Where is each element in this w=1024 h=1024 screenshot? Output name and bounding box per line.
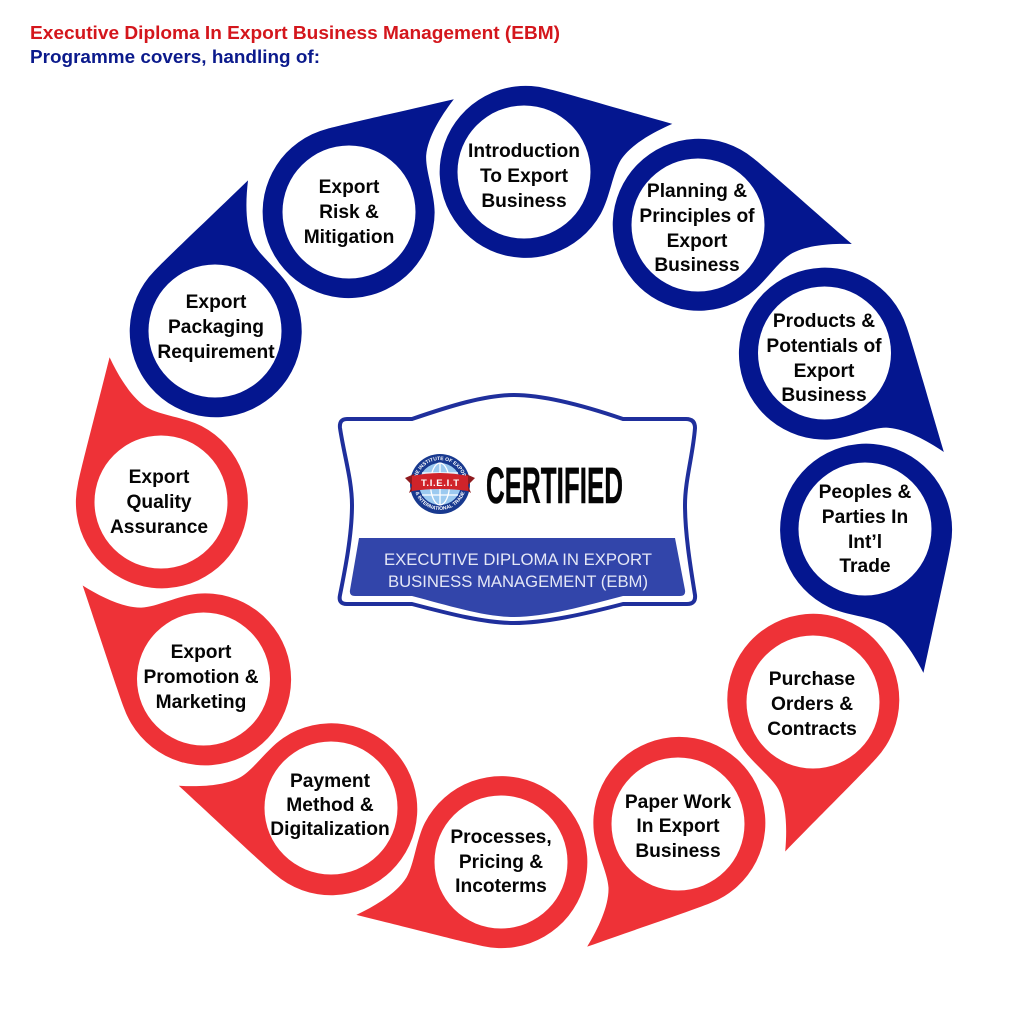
logo: T.I.E.I.T seal bbox=[405, 454, 475, 514]
step: Peoples & Parties In Int'l Trade: Parties In bbox=[822, 507, 908, 528]
step: Processes, Pricing & Incoterms bbox=[327, 752, 612, 996]
title: Executive Diploma In Export Business Management (EBM) bbox=[30, 22, 560, 43]
step: Export Risk & Mitigation: Mitigation bbox=[304, 227, 394, 248]
step: Export Promotion & Marketing: Export bbox=[171, 642, 232, 663]
step: Payment Method & Digitalization: Payment bbox=[290, 771, 371, 792]
step: Purchase Orders & Contracts bbox=[701, 600, 913, 867]
step: Processes, Pricing & Incoterms: Processes, bbox=[450, 827, 552, 848]
step: Products & Potentials of Export Business: Products & bbox=[773, 311, 875, 332]
step: Export Quality Assurance: Export bbox=[129, 467, 190, 488]
step: Planning & Principles of Export Business: Export bbox=[667, 231, 728, 252]
step: Export Risk & Mitigation bbox=[227, 40, 517, 334]
step: Peoples & Parties In Int'l Trade: Trade bbox=[839, 556, 891, 577]
logo: T.I.E.I.T seal: & INTERNATIONAL TRADE bbox=[416, 491, 465, 510]
step: Products & Potentials of Export Business bbox=[704, 233, 999, 518]
step: Peoples & Parties In Int'l Trade: Peoples & bbox=[819, 482, 912, 503]
step: Export Packaging Requirement bbox=[114, 162, 332, 433]
step: Planning & Principles of Export Business bbox=[603, 129, 862, 329]
center badge: certified bbox=[338, 393, 698, 625]
step: Paper Work In Export Business bbox=[518, 703, 800, 998]
step: Export Quality Assurance bbox=[29, 328, 272, 612]
logo: T.I.E.I.T seal: T.I.E.I.T bbox=[421, 478, 459, 489]
step: Purchase Orders & Contracts: Orders & bbox=[771, 694, 853, 715]
subtitle: Programme covers, handling of: bbox=[30, 46, 320, 67]
step: Peoples & Parties In Int'l Trade bbox=[754, 418, 1003, 705]
step: Products & Potentials of Export Business: Potentials of bbox=[766, 336, 882, 357]
step: Export Risk & Mitigation: Export bbox=[319, 177, 380, 198]
step: Paper Work In Export Business: In Export bbox=[636, 816, 720, 837]
badge outline bbox=[340, 395, 695, 623]
certified word: CERTIFIED bbox=[486, 457, 623, 514]
step: Payment Method & Digitalization: Digitalization bbox=[270, 819, 390, 840]
step: Planning & Principles of Export Business: Principles of bbox=[639, 206, 755, 227]
step: Export Quality Assurance: Quality bbox=[126, 492, 192, 513]
step: Introduction To Export Business: To Export bbox=[480, 166, 569, 187]
step: Export Quality Assurance: Assurance bbox=[110, 517, 208, 538]
step: Export Promotion & Marketing: Promotion & bbox=[143, 667, 259, 688]
step: Paper Work In Export Business: Business bbox=[635, 841, 721, 862]
step: Planning & Principles of Export Business: Planning & bbox=[647, 181, 747, 202]
banner text line 2: BUSINESS MANAGEMENT (EBM) bbox=[388, 573, 648, 591]
step: Processes, Pricing & Incoterms: Incoterms bbox=[455, 876, 547, 897]
step: Introduction To Export Business: Introduction bbox=[468, 141, 580, 162]
step: Export Packaging Requirement: Export bbox=[186, 292, 247, 313]
step: Purchase Orders & Contracts: Contracts bbox=[767, 719, 857, 740]
blue banner bbox=[350, 538, 685, 617]
step: Export Promotion & Marketing bbox=[30, 517, 326, 800]
step: Products & Potentials of Export Business: Business bbox=[781, 385, 867, 406]
step: Export Risk & Mitigation: Risk & bbox=[319, 202, 379, 223]
step: Payment Method & Digitalization bbox=[166, 701, 429, 907]
step: Processes, Pricing & Incoterms: Pricing & bbox=[459, 852, 543, 873]
step: Payment Method & Digitalization: Method & bbox=[286, 795, 374, 816]
step: Export Packaging Requirement: Requirement bbox=[157, 342, 275, 363]
step: Introduction To Export Business bbox=[417, 42, 699, 280]
step: Introduction To Export Business: Business bbox=[481, 191, 567, 212]
step: Products & Potentials of Export Business: Export bbox=[794, 361, 855, 382]
step: Paper Work In Export Business: Paper Work bbox=[625, 792, 731, 813]
step: Purchase Orders & Contracts: Purchase bbox=[769, 669, 856, 690]
step: Export Promotion & Marketing: Marketing bbox=[156, 692, 246, 713]
step: Export Packaging Requirement: Packaging bbox=[168, 317, 264, 338]
step: Peoples & Parties In Int'l Trade: Int’l bbox=[848, 532, 882, 553]
step: Planning & Principles of Export Business: Business bbox=[654, 255, 740, 276]
banner text: EXECUTIVE DIPLOMA IN EXPORT bbox=[384, 551, 652, 569]
logo: T.I.E.I.T seal: THE INSTITUTE OF EXPORT bbox=[414, 456, 466, 476]
